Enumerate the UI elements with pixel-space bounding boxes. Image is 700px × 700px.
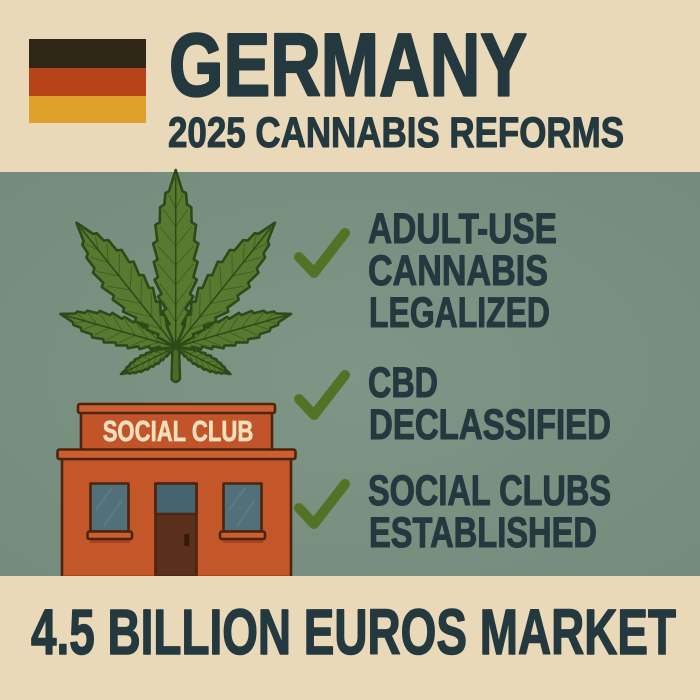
- sign text: SOCIAL CLUB: [103, 416, 253, 448]
- panel: green main band: [0, 172, 700, 576]
- item: adult-use cannabis legalized: LEGALIZED: [369, 289, 550, 337]
- item: adult-use cannabis legalized: ADULT-USE: [368, 205, 557, 253]
- header band: flag and title: [29, 14, 624, 157]
- building wall: [62, 459, 291, 577]
- item: CBD declassified: [299, 359, 611, 449]
- item: adult-use cannabis legalized: CANNABIS: [368, 247, 548, 295]
- lower cornice: [58, 450, 296, 459]
- item: CBD declassified: CBD: [368, 359, 438, 407]
- icon: cannabis leaf: [56, 170, 295, 382]
- left window: [88, 484, 132, 543]
- item: adult-use cannabis legalized: [299, 205, 557, 337]
- icon: German flag: [29, 39, 146, 123]
- item: CBD declassified: DECLASSIFIED: [369, 401, 611, 449]
- illustration: social club building: [58, 404, 296, 577]
- item: social clubs established: ESTABLISHED: [369, 509, 597, 557]
- item: social clubs established: SOCIAL CLUBS: [368, 467, 611, 515]
- sign board: [81, 412, 272, 450]
- checklist: [299, 205, 611, 557]
- top cornice: [78, 404, 275, 413]
- right window: [220, 484, 265, 543]
- title: GERMANY: [169, 14, 527, 114]
- door: [156, 484, 196, 576]
- item: social clubs established: [299, 467, 611, 557]
- footer band: [0, 576, 700, 700]
